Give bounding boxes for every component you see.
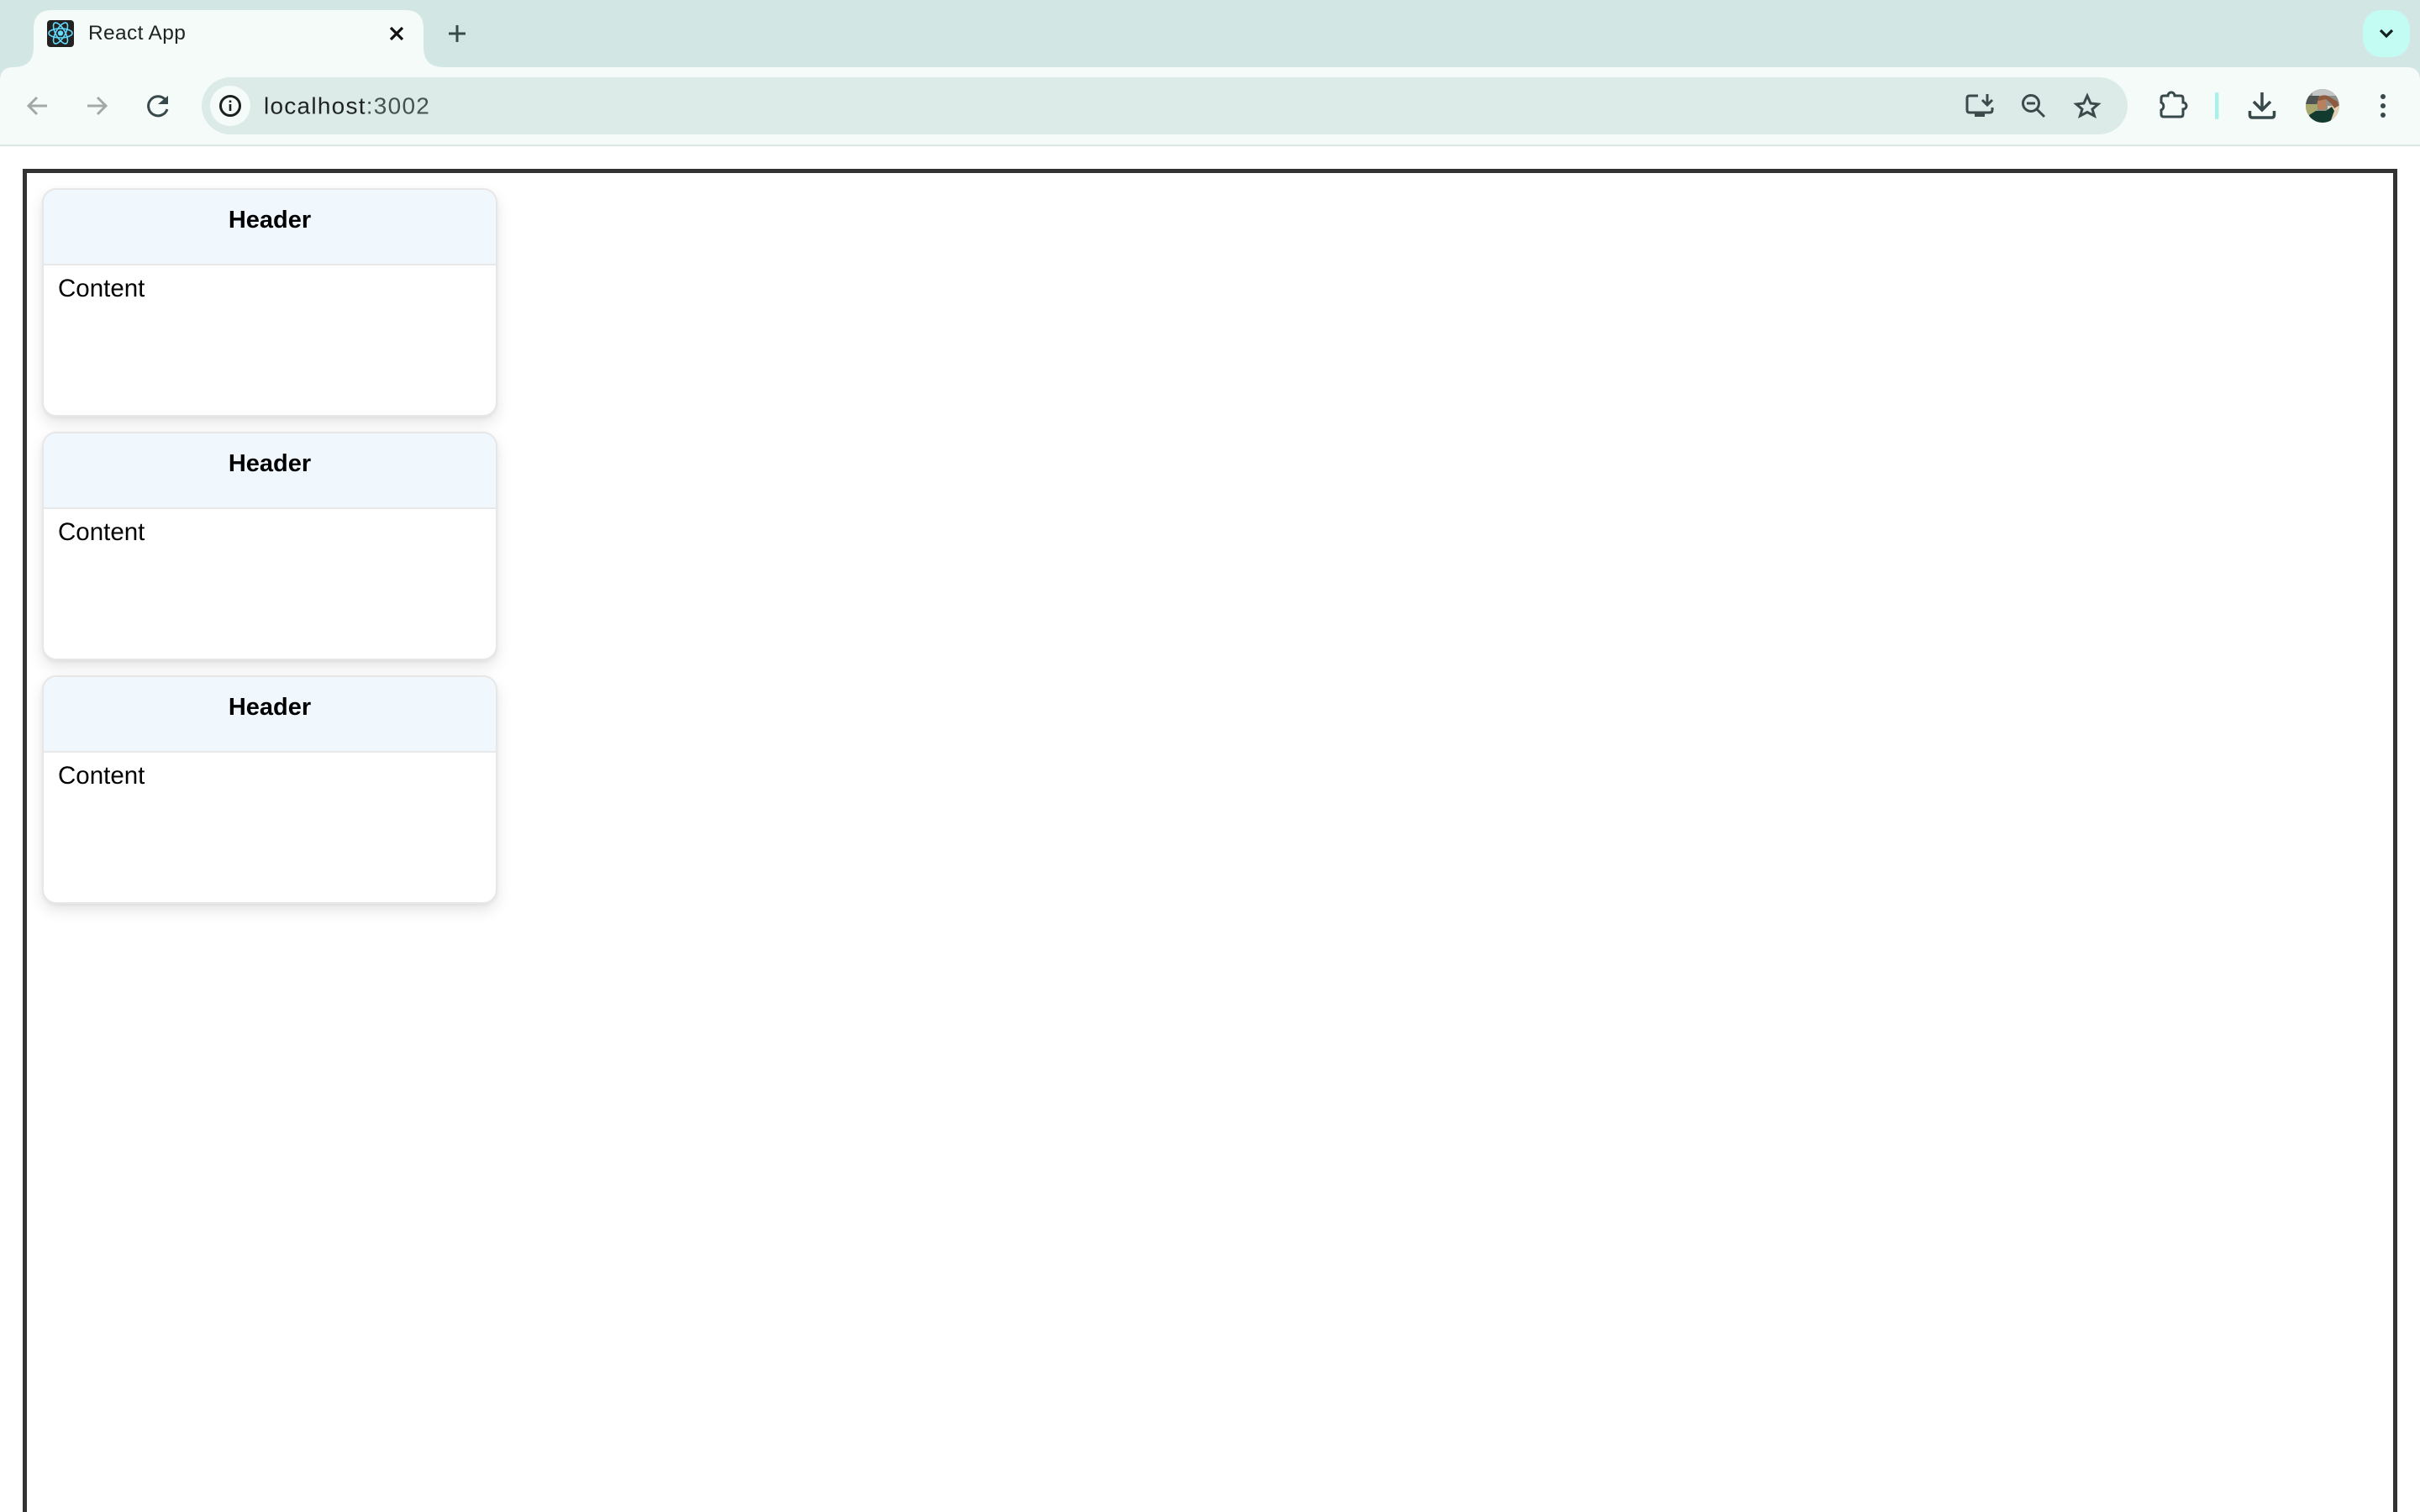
card 1 header	[44, 190, 496, 265]
tab list button	[2363, 10, 2410, 57]
browser toolbar	[0, 67, 2420, 147]
panel: card 2	[42, 432, 497, 660]
icon: extensions	[2161, 92, 2186, 117]
browser chrome	[0, 0, 2420, 147]
address bar	[202, 77, 2128, 134]
icon: zoom out	[2023, 96, 2044, 117]
card 2 header: Header	[229, 450, 311, 477]
toolbar separator	[2215, 92, 2218, 119]
card 2 content: Content	[58, 518, 145, 546]
card 1 header: Header	[229, 207, 311, 234]
active tab	[13, 10, 444, 67]
icon: reload	[149, 96, 168, 116]
icon: install app	[1967, 94, 1992, 117]
avatar	[2306, 89, 2339, 123]
panel: card 3	[42, 675, 497, 904]
panel: card 1	[42, 188, 497, 417]
card 3 content: Content	[58, 762, 145, 790]
url text: localhost:3002	[264, 92, 430, 119]
card 3 header	[44, 677, 496, 753]
card 2 header	[44, 433, 496, 509]
icon: react favicon	[47, 20, 74, 47]
card 1 content: Content	[58, 275, 145, 302]
icon: bookmark star	[2076, 96, 2098, 116]
icon: forward	[87, 97, 106, 114]
icon: new tab	[449, 25, 466, 42]
icon: close tab	[391, 28, 402, 39]
icon: site info	[210, 86, 250, 126]
tab title: React App	[88, 22, 186, 45]
card 3 header: Header	[229, 694, 311, 721]
icon: menu	[2381, 94, 2386, 118]
icon: back	[29, 97, 47, 114]
icon: downloads	[2250, 92, 2274, 118]
